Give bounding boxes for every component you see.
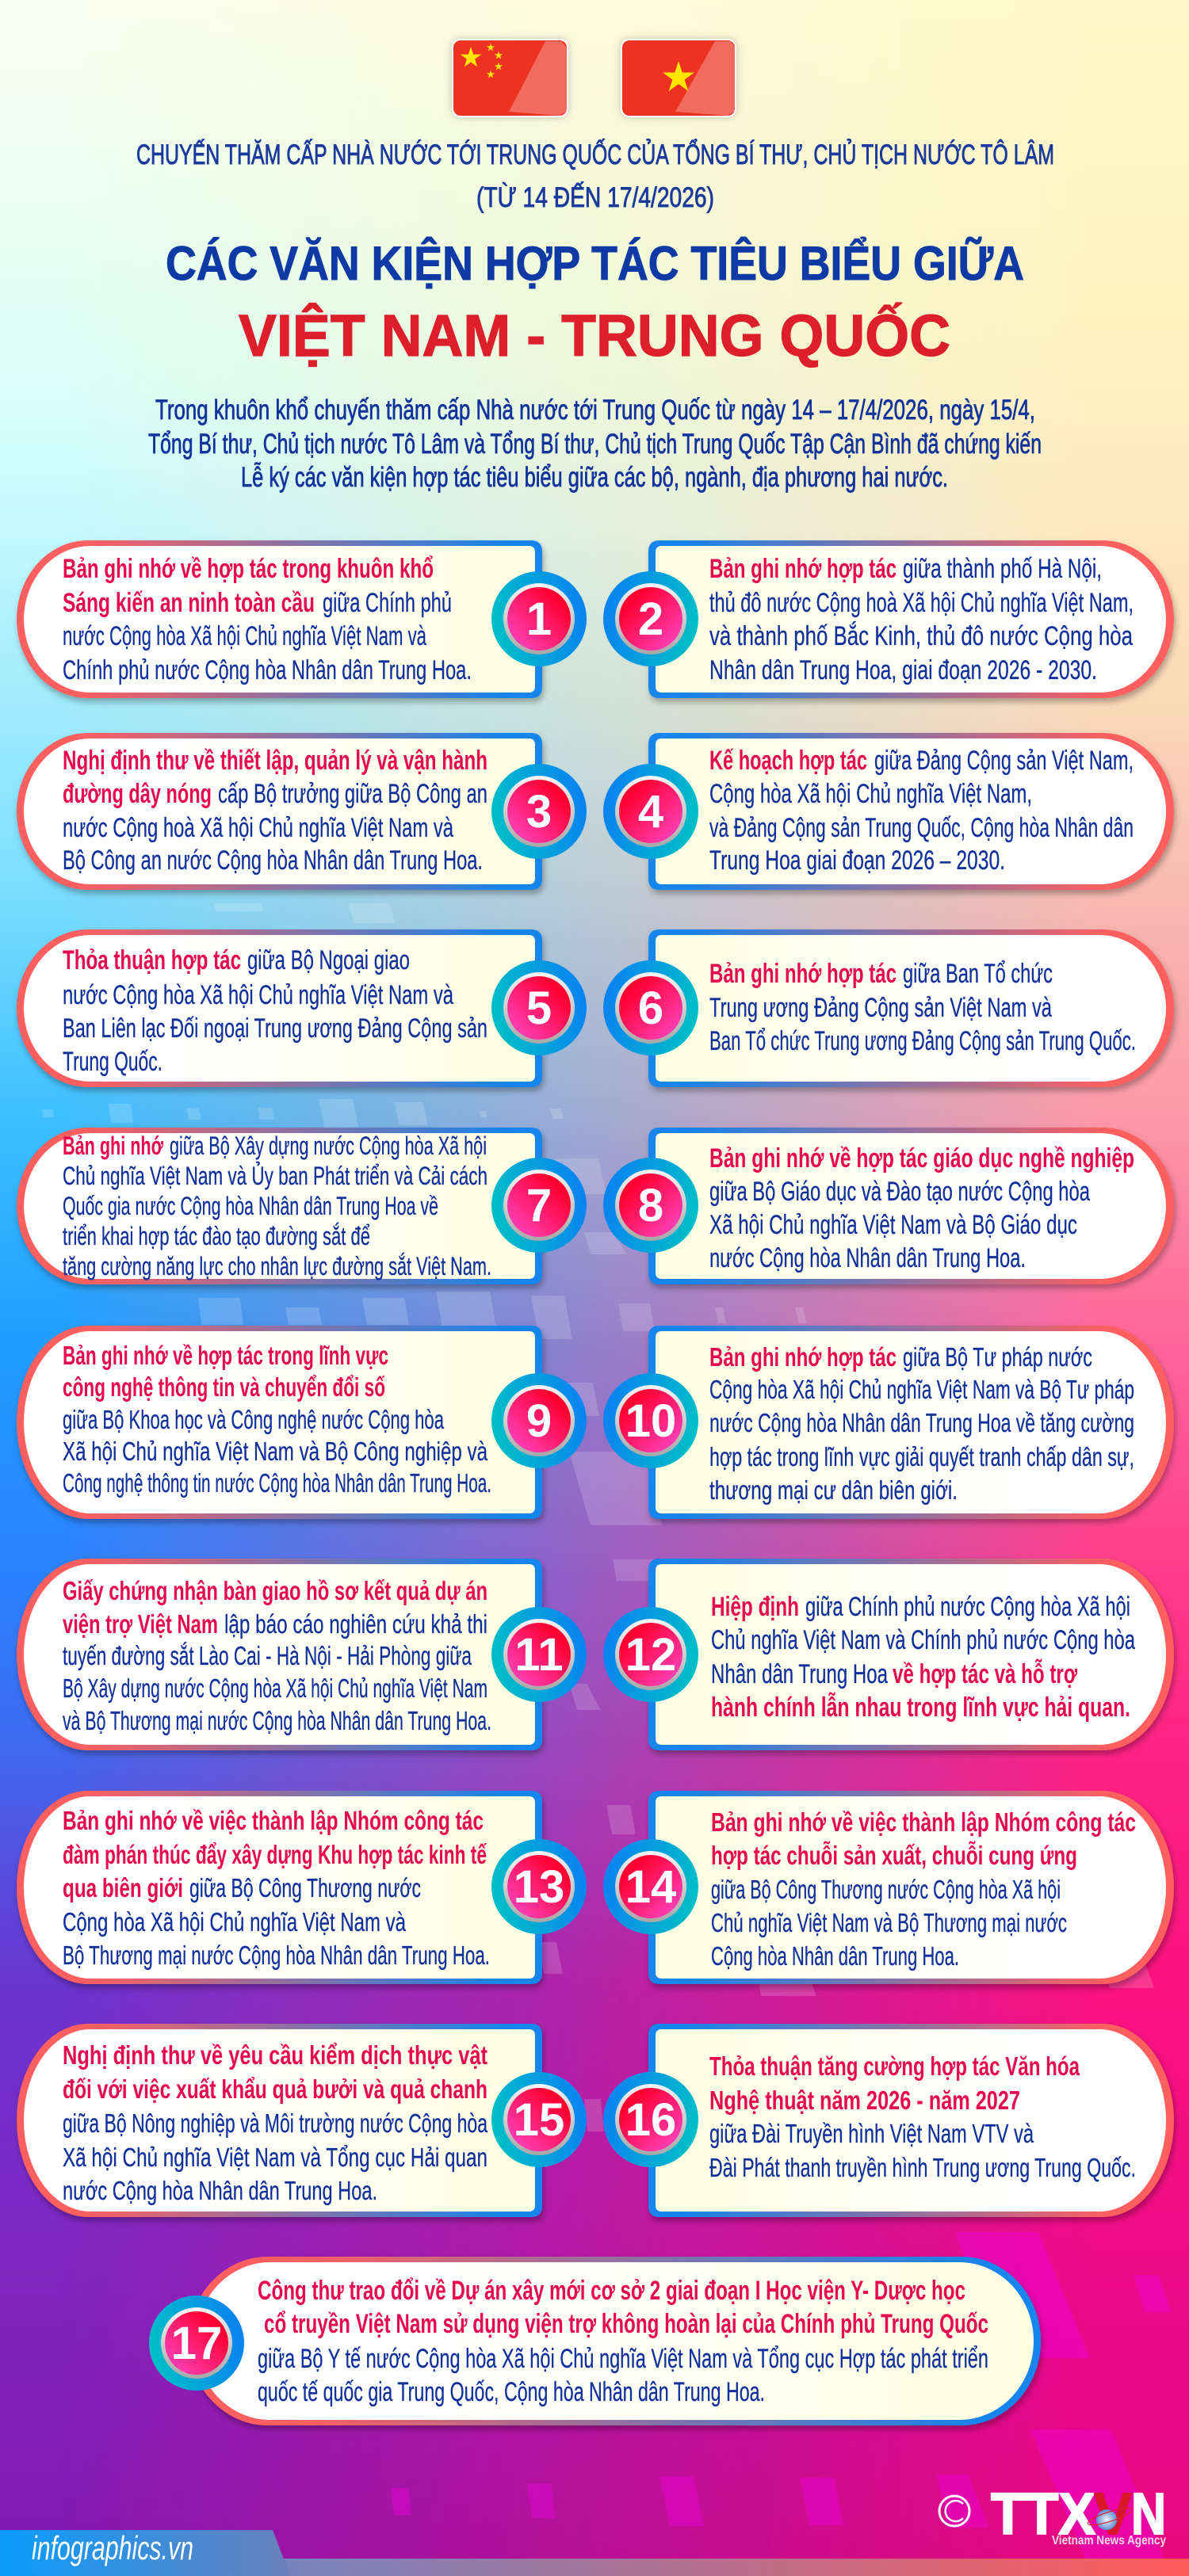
badge: number 17: 17 [171,2318,222,2369]
text: document 16 [709,2051,1136,2182]
badge: number 10: 10 [625,1395,676,1447]
text: document 7: Chủ nghĩa Việt Nam và Ủy ban Phát triển và Cải cách [63,1162,487,1190]
header: country flags [453,40,736,116]
text: document 8 [709,1143,1134,1273]
text: document 13: giữa Bộ Công Thương nước [189,1873,421,1902]
text: document 1 [63,554,472,685]
text: document 7: Quốc gia nước Cộng hòa Nhân dân Trung Hoa về [63,1192,438,1220]
text: document 2: giữa thành phố Hà Nội, [903,554,1102,584]
text: document 4 [709,746,1134,876]
badge: number 7: 7 [526,1180,552,1231]
text: document 5: Ban Liên lạc Đối ngoại Trung ương Đảng Cộng sản [63,1013,487,1044]
text: document 9: Bản ghi nhớ về hợp tác trong lĩnh vực [63,1341,388,1370]
text: document 3: đường dây nóng [63,779,212,809]
footer tab: infographics.vn [0,2529,290,2576]
text: document 6: Bản ghi nhớ hợp tác [709,959,897,989]
header: visit subtitle [136,139,1054,213]
title: VIỆT NAM - TRUNG QUỐC [239,303,950,368]
text: document 5: Trung Quốc. [63,1047,162,1077]
panel: document 4 [603,733,1174,890]
badge: number 12: 12 [625,1629,676,1681]
badge: number 11: 11 [514,1629,564,1681]
text: document 16: Nghệ thuật năm 2026 - năm 2027 [709,2086,1020,2115]
panel: document 11 [17,1559,587,1750]
text: document 16: giữa Đài Truyền hình Việt Nam VTV và [709,2119,1034,2148]
text: document 3: nước Cộng hoà Xã hội Chủ nghĩa Việt Nam và [63,813,453,843]
panel: document 8 [603,1128,1174,1284]
text: document 5: Thỏa thuận hợp tác [63,945,241,975]
text: document 17 [258,2276,988,2407]
header: visit subtitle: (TỪ 14 ĐẾN 17/4/2026) [476,181,714,213]
panel: document 14 [603,1791,1174,1984]
text: document 11: lập báo cáo nghiên cứu khả thi [224,1609,487,1639]
text: document 12 [711,1592,1135,1723]
panel: document 3 [17,733,587,890]
badge: number 12 [603,1607,698,1702]
text: document 7: triển khai hợp tác đào tạo đường sắt để [63,1222,370,1250]
text: document 9: Công nghệ thông tin nước Cộng hòa Nhân dân Trung Hoa. [63,1468,491,1498]
text: document 15: Xã hội Chủ nghĩa Việt Nam và Tổng cục Hải quan [63,2143,487,2172]
text: document 7 [63,1132,491,1280]
badge: number 3: 3 [526,786,552,838]
badge: number 13: 13 [514,1861,564,1913]
footer tab: infographics.vn: infographics.vn [32,2529,193,2566]
text: document 5: giữa Bộ Ngoại giao [247,945,410,975]
text: document 6: giữa Ban Tổ chức [903,959,1053,989]
text: document 12: về hợp tác và hỗ trợ [893,1659,1078,1689]
panel: document 6 [603,929,1174,1087]
badge: number 16 [603,2072,698,2167]
text: document 4: Kế hoạch hợp tác [709,746,867,776]
text: document 1: nước Cộng hòa Xã hội Chủ nghĩa Việt Nam và [63,621,426,651]
icon: copyright [939,2496,969,2526]
panel: document 15 [17,2024,587,2217]
text: document 4: Cộng hòa Xã hội Chủ nghĩa Việt Nam, [709,779,1032,809]
panel: document 17 [149,2257,1041,2425]
panel: document 10 [603,1326,1174,1519]
badge: number 2: 2 [638,593,663,645]
panel: document 7 [17,1128,587,1284]
text: document 15 [63,2040,487,2205]
text: document 2 [709,554,1134,685]
title: CÁC VĂN KIỆN HỢP TÁC TIÊU BIỂU GIỮA [166,237,1024,290]
text: document 3: Nghị định thư về thiết lập, quản lý và vận hành [63,746,487,776]
text: document 1: Chính phủ nước Cộng hòa Nhân dân Trung Hoa. [63,655,472,685]
panel: document 13 [17,1791,587,1984]
badge: number 9 [491,1373,587,1468]
text: document 13: đàm phán thúc đẩy xây dựng Khu hợp tác kinh tế [63,1840,487,1869]
badge: number 6: 6 [638,983,663,1034]
text: document 1: Bản ghi nhớ về hợp tác trong khuôn khổ [63,554,434,584]
text: document 7: Bản ghi nhớ [63,1132,163,1160]
text: document 15: giữa Bộ Nông nghiệp và Môi trường nước Cộng hòa [63,2109,487,2138]
text: document 9 [63,1341,491,1498]
panel: document 9 [17,1326,587,1519]
logo: copyright TTXVN [939,2481,1166,2547]
text: document 11: Bộ Xây dựng nước Cộng hòa Xã hội Chủ nghĩa Việt Nam [63,1673,487,1703]
badge: number 7 [491,1158,587,1253]
panel: document 16 [603,2024,1174,2217]
text: document 6 [709,959,1136,1056]
text: document 13: Bản ghi nhớ về việc thành lập Nhóm công tác [63,1806,484,1835]
text: document 3: Bộ Công an nước Cộng hòa Nhân dân Trung Hoa. [63,845,483,876]
text: document 7: tăng cường năng lực cho nhân lực đường sắt Việt Nam. [63,1252,491,1280]
panel: document 5 [17,929,587,1087]
badge: number 8 [603,1158,698,1253]
badge: number 8: 8 [638,1180,663,1231]
text: document 15: nước Cộng hòa Nhân dân Trung Hoa. [63,2176,377,2205]
text: document 11: Giấy chứng nhận bàn giao hồ sơ kết quả dự án [63,1576,487,1605]
badge: number 2 [603,571,698,666]
text: document 8: nước Cộng hòa Nhân dân Trung Hoa. [709,1243,1026,1273]
badge: number 11 [491,1607,587,1702]
text: document 11: tuyến đường sắt Lào Cai - Hà Nội - Hải Phòng giữa [63,1641,472,1670]
badge: number 1 [491,571,587,666]
text: document 13 [63,1806,490,1970]
text: document 10: Bản ghi nhớ hợp tác [709,1342,897,1372]
text: document 13: qua biên giới [63,1873,183,1902]
text: document 1: giữa Chính phủ [323,588,452,618]
text: document 13: Cộng hòa Xã hội Chủ nghĩa Việt Nam và [63,1907,406,1937]
badge: number 5 [491,960,587,1055]
text: document 11: và Bộ Thương mại nước Cộng hòa Nhân dân Trung Hoa. [63,1706,491,1735]
text: document 10 [709,1342,1134,1505]
badge: number 3 [491,764,587,859]
text: document 10: giữa Bộ Tư pháp nước [903,1342,1092,1372]
text: document 1: Sáng kiến an ninh toàn cầu [63,588,315,618]
intro text: Lễ ký các văn kiện hợp tác tiêu biểu giữa các bộ, ngành, địa phương hai nước. [241,462,948,493]
text: document 5: nước Cộng hòa Xã hội Chủ nghĩa Việt Nam và [63,980,453,1010]
text: document 4: Trung Hoa giai đoạn 2026 – 2030. [709,845,1005,876]
text: document 6: Trung ương Đảng Cộng sản Việt Nam và [709,993,1052,1023]
text: document 9: công nghệ thông tin và chuyển đổi số [63,1372,385,1402]
logo: copyright TTXVN: V [1094,2481,1132,2547]
text: document 3 [63,746,487,876]
text: document 3: cấp Bộ trưởng giữa Bộ Công an [218,779,487,809]
icon: flag of China [453,40,568,116]
panel: document 2 [603,540,1174,698]
text: document 13: Bộ Thương mại nước Cộng hòa Nhân dân Trung Hoa. [63,1941,490,1970]
badge: number 17 [149,2296,244,2391]
logo: copyright TTXVN: N [1131,2481,1166,2547]
text: document 14 [711,1807,1136,1971]
text: document 5 [63,945,487,1077]
badge: number 15 [491,2072,587,2167]
text: document 15: đối với việc xuất khẩu quả bưởi và quả chanh [63,2074,487,2104]
badge: number 14: 14 [625,1861,676,1913]
text: document 2: Bản ghi nhớ hợp tác [709,554,897,584]
text: document 11 [63,1576,491,1735]
logo: copyright TTXVN: Vietnam News Agency [1052,2534,1166,2547]
logo: copyright TTXVN: TTX [991,2481,1095,2547]
text: document 12: Nhân dân Trung Hoa [711,1659,888,1689]
text: document 9: Xã hội Chủ nghĩa Việt Nam và Bộ Công nghiệp và [63,1437,487,1466]
icon: flag of Vietnam [621,40,736,116]
text: document 7: giữa Bộ Xây dựng nước Cộng hòa Xã hội [170,1132,487,1160]
badge: number 13 [491,1839,587,1934]
badge: number 9: 9 [526,1395,552,1447]
panel: document 1 [17,540,587,698]
text: document 10: thương mại cư dân biên giới. [709,1475,958,1505]
title [166,237,1024,368]
badge: number 4 [603,764,698,859]
text: document 12: Hiệp định [711,1592,799,1622]
text: document 14: Cộng hòa Nhân dân Trung Hoa. [711,1941,959,1971]
text: document 15: Nghị định thư về yêu cầu kiểm dịch thực vật [63,2040,487,2070]
panel: document 12 [603,1559,1174,1750]
text: document 11: viện trợ Việt Nam [63,1609,218,1639]
intro text [148,395,1042,493]
badge: number 14 [603,1839,698,1934]
badge: number 10 [603,1373,698,1468]
badge: number 4: 4 [638,786,663,838]
footer bar [0,2559,1189,2576]
badge: number 16: 16 [625,2094,676,2146]
badge: number 1: 1 [526,593,552,645]
badge: number 15: 15 [514,2094,564,2146]
badge: number 6 [603,960,698,1055]
text: document 9: giữa Bộ Khoa học và Công nghệ nước Cộng hòa [63,1405,444,1434]
badge: number 5: 5 [526,983,552,1034]
text: document 17: quốc tế quốc gia Trung Quốc, Cộng hòa Nhân dân Trung Hoa. [258,2377,765,2407]
